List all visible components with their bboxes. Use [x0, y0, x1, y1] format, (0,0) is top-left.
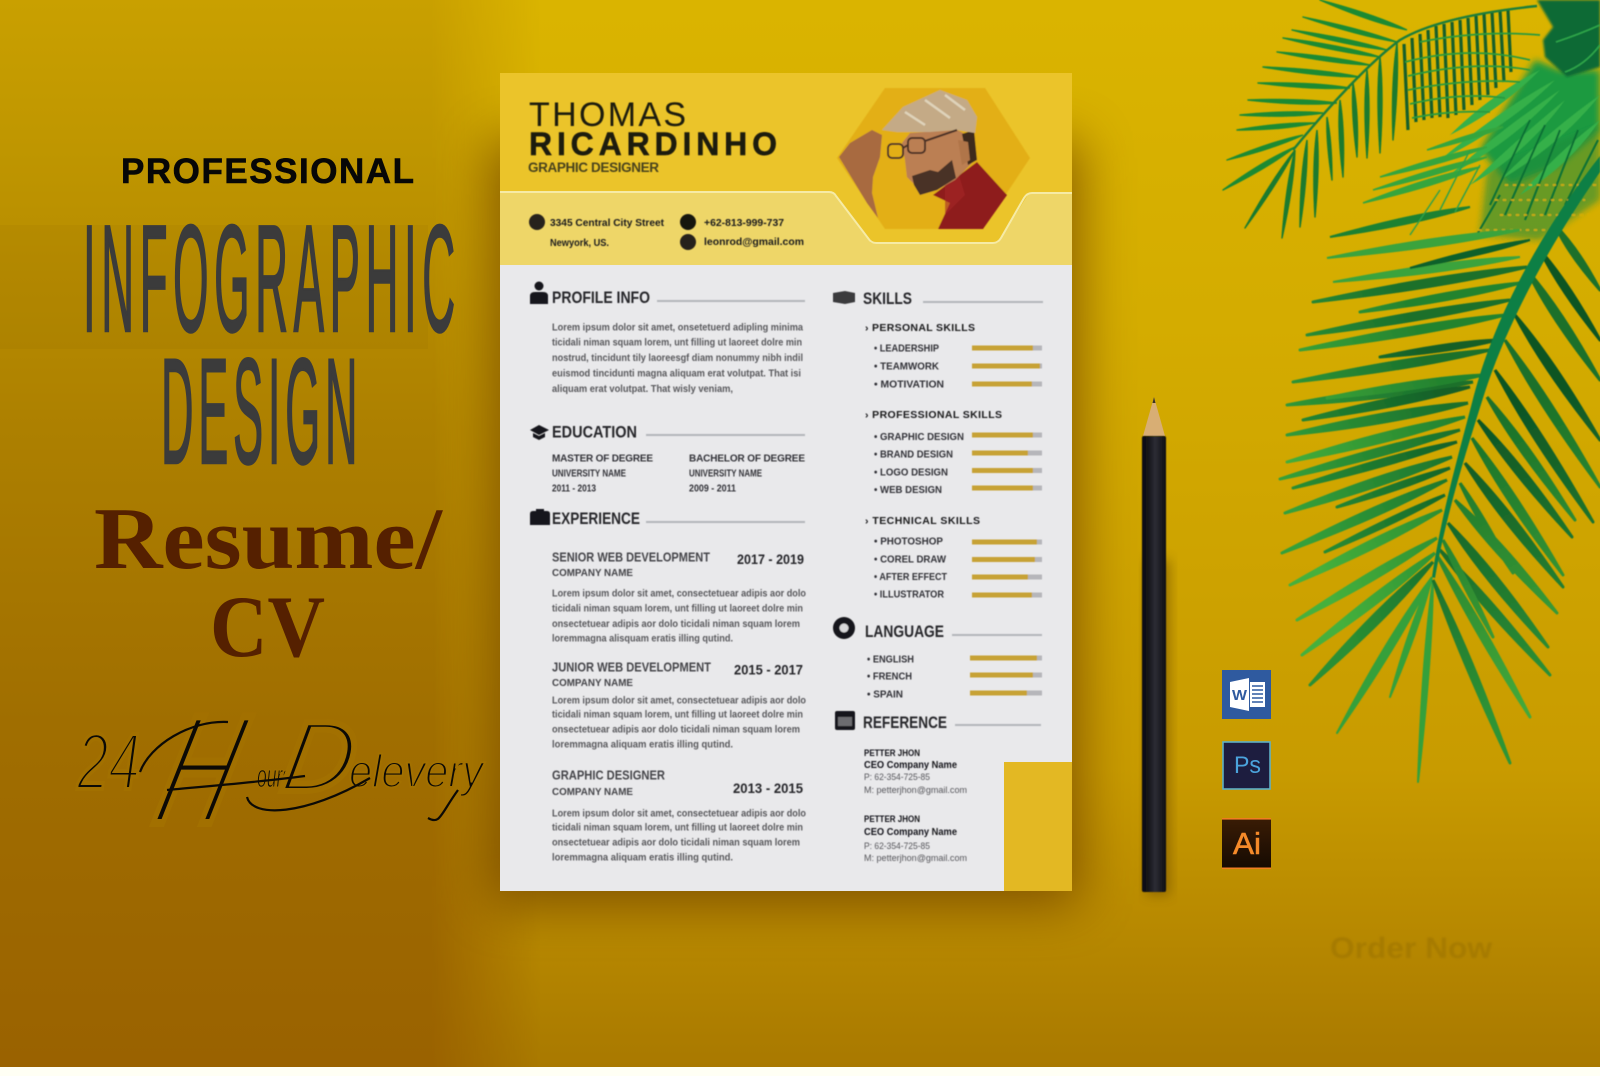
professional skills [865, 409, 1042, 496]
heading: resume: Resume/ [94, 491, 444, 588]
technical skills [865, 515, 1042, 600]
job: graphic designer: 2013 - 2015 [733, 780, 803, 796]
job: graphic designer: onsectetuear adipis aor dolo ticidali niman squam lorem [552, 836, 800, 848]
section: profile info: ticidali niman squam lorem, unt filling ut laoreet dolre min [552, 336, 802, 348]
script line: 24 hours delivery: D [274, 702, 366, 813]
icon: illustrator: Ai [1233, 826, 1261, 861]
middle frond leaflets [1327, 127, 1530, 282]
professional skills: • WEB DESIGN [874, 485, 942, 496]
professional skills: • GRAPHIC DESIGN [874, 432, 964, 443]
left column [530, 282, 806, 864]
job: senior web development: 2017 - 2019 [737, 551, 804, 567]
script line: 24 hours delivery: 24 [76, 717, 140, 806]
resume name: GRAPHIC DESIGNER [528, 160, 659, 175]
heading: cv: CV [210, 579, 325, 676]
reference contact one [864, 748, 967, 795]
technical skills: • COREL DRAW [874, 554, 947, 566]
reference contact two: M: petterjhon@gmail.com [864, 853, 967, 863]
job: graphic designer: loremmagna aliquam eratis illing qutind. [552, 852, 733, 864]
professional skills: › PROFESSIONAL SKILLS [865, 409, 1002, 421]
reference contact one: P: 62-354-725-85 [864, 772, 930, 782]
reference contact two: P: 62-354-725-85 [864, 841, 930, 851]
job: graphic designer: Lorem ipsum dolor sit amet, consectetuear adipis aor dolo [552, 808, 806, 820]
job: senior web development: Lorem ipsum dolor sit amet, consectetuear adipis aor dolo [552, 588, 806, 600]
order now label: Order Now [1330, 932, 1493, 965]
icon: email [680, 234, 696, 250]
section: experience [530, 509, 806, 864]
section: language: • SPAIN [867, 690, 903, 700]
yellow corner block [1004, 762, 1072, 891]
contact details: Newyork, US. [550, 237, 609, 249]
job: junior web development: JUNIOR WEB DEVELOPMENT [552, 660, 711, 674]
heading: professional: PROFESSIONAL [121, 152, 414, 191]
section: reference: REFERENCE [863, 713, 947, 732]
job: junior web development: 2015 - 2017 [734, 662, 803, 678]
technical skills: › TECHNICAL SKILLS [865, 515, 980, 527]
reference contact one: PETTER JHON [864, 748, 920, 758]
icon: briefcase [530, 509, 550, 525]
icon: contact card [835, 711, 855, 730]
section: education [530, 422, 805, 494]
section: experience: EXPERIENCE [552, 509, 640, 528]
palm leaf [1223, 0, 1600, 782]
job: junior web development: COMPANY NAME [552, 677, 633, 689]
icon: location [529, 214, 545, 230]
contact details: +62-813-999-737 [704, 217, 784, 229]
reference contact two: CEO Company Name [864, 827, 957, 838]
personal skills: • LEADERSHIP [874, 344, 939, 354]
section: profile info: euismod tincidunti magna aliquam erat volutpat. That isi [552, 368, 801, 380]
technical skills: • AFTER EFFECT [874, 572, 947, 583]
resume header band [500, 73, 1072, 265]
job: junior web development: onsectetuear adipis aor dolo ticidali niman squam lorem [552, 724, 800, 736]
section: profile info: aliquam erat volutpat. That wisly veniam, [552, 383, 733, 395]
icon: word [1222, 670, 1271, 719]
job: junior web development [552, 660, 806, 750]
technical skills: • PHOTOSHOP [874, 536, 943, 548]
resume name [528, 96, 777, 175]
personal skills [865, 322, 1042, 390]
personal skills: › PERSONAL SKILLS [865, 322, 975, 334]
personal skills: • MOTIVATION [874, 380, 944, 390]
section: skills: SKILLS [863, 289, 912, 308]
job: graphic designer [552, 768, 806, 864]
job: junior web development: loremmagna aliquam eratis illing qutind. [552, 738, 733, 750]
job: senior web development: onsectetuear adipis aor dolo ticidali niman squam lorem [552, 618, 800, 630]
section: education: 2009 - 2011 [689, 484, 736, 494]
section: education: EDUCATION [552, 422, 637, 442]
reference contact two [864, 814, 967, 863]
section: education: BACHELOR OF DEGREE [689, 454, 805, 464]
contact details: 3345 Central City Street [550, 217, 664, 229]
heading: design: DESIGN [161, 329, 362, 496]
script line: 24 hours delivery: ours [257, 758, 291, 794]
job: senior web development: ticidali niman squam lorem, unt filling ut laoreet dolre min [552, 602, 803, 614]
section: education: UNIVERSITY NAME [552, 468, 626, 480]
script line: 24 hours delivery [76, 683, 486, 856]
icon: graduation cap [530, 425, 549, 440]
section: language: • ENGLISH [867, 654, 914, 666]
main frond right leaflets [1433, 250, 1600, 763]
section: profile info: PROFILE INFO [552, 288, 650, 307]
section: education: 2011 - 2013 [552, 484, 596, 494]
job: senior web development [552, 550, 806, 644]
job: senior web development: SENIOR WEB DEVELOPMENT [552, 550, 710, 564]
panel: resume sheet [500, 73, 1072, 891]
section: language: • FRENCH [867, 672, 912, 682]
section: profile info: nostrud, tincidunt tily laoreesgf diam nonummy nibh indil [552, 352, 803, 364]
icon: books [833, 291, 855, 304]
upper frond midrib [1293, 6, 1537, 150]
section: education: MASTER OF DEGREE [552, 454, 653, 464]
right column [833, 289, 1043, 863]
section: language [833, 617, 1042, 700]
job: graphic designer: COMPANY NAME [552, 786, 633, 798]
resume name: THOMAS [529, 96, 686, 134]
icon: photoshop [1223, 742, 1270, 789]
professional skills: • LOGO DESIGN [874, 468, 948, 478]
job: junior web development: Lorem ipsum dolor sit amet, consectetuear adipis aor dolo [552, 694, 806, 706]
section: language: LANGUAGE [865, 622, 944, 641]
icon: photoshop: Ps [1234, 752, 1261, 779]
icon: phone [680, 214, 696, 230]
section: reference [835, 711, 1041, 863]
dense frond base [1440, 0, 1600, 240]
job: graphic designer: GRAPHIC DESIGNER [552, 768, 665, 782]
personal skills: • TEAMWORK [874, 362, 940, 372]
main frond left leaflets [1280, 267, 1527, 553]
job: senior web development: loremmagna alisquam eratis illing qutind. [552, 632, 733, 644]
script line: 24 hours delivery: H [141, 683, 262, 856]
resume name: RICARDINHO [529, 126, 777, 162]
heading: infographic: INFOGRAPHIC [83, 193, 461, 364]
section: education: UNIVERSITY NAME [689, 468, 762, 480]
job: graphic designer: ticidali niman squam lorem, unt filling ut laoreet dolre min [552, 822, 803, 834]
upper frond hatching [1404, 10, 1540, 130]
icon: illustrator [1222, 818, 1271, 869]
section: profile info [530, 282, 805, 395]
job: senior web development: COMPANY NAME [552, 567, 633, 579]
professional skills: • BRAND DESIGN [874, 450, 953, 460]
contact details [529, 214, 804, 250]
reference contact one: M: petterjhon@gmail.com [864, 785, 967, 795]
job: junior web development: ticidali niman squam lorem, unt filling ut laoreet dolre min [552, 708, 803, 720]
icon: globe [833, 617, 855, 639]
technical skills: • ILLUSTRATOR [874, 590, 945, 600]
pencil [1142, 397, 1170, 895]
contact details: leonrod@gmail.com [704, 236, 804, 248]
upper frond leaflets [1223, 0, 1407, 190]
icon: person [530, 282, 548, 304]
script line: 24 hours delivery: elevery [349, 745, 486, 797]
reference contact one: CEO Company Name [864, 760, 957, 771]
icon: word: W [1232, 687, 1248, 704]
section: profile info: Lorem ipsum dolor sit amet, onsetetuerd adipling minima [552, 322, 803, 334]
section: skills [833, 289, 1043, 600]
reference contact two: PETTER JHON [864, 814, 920, 824]
portrait photo [837, 88, 1030, 229]
main frond midrib [1432, 156, 1600, 578]
